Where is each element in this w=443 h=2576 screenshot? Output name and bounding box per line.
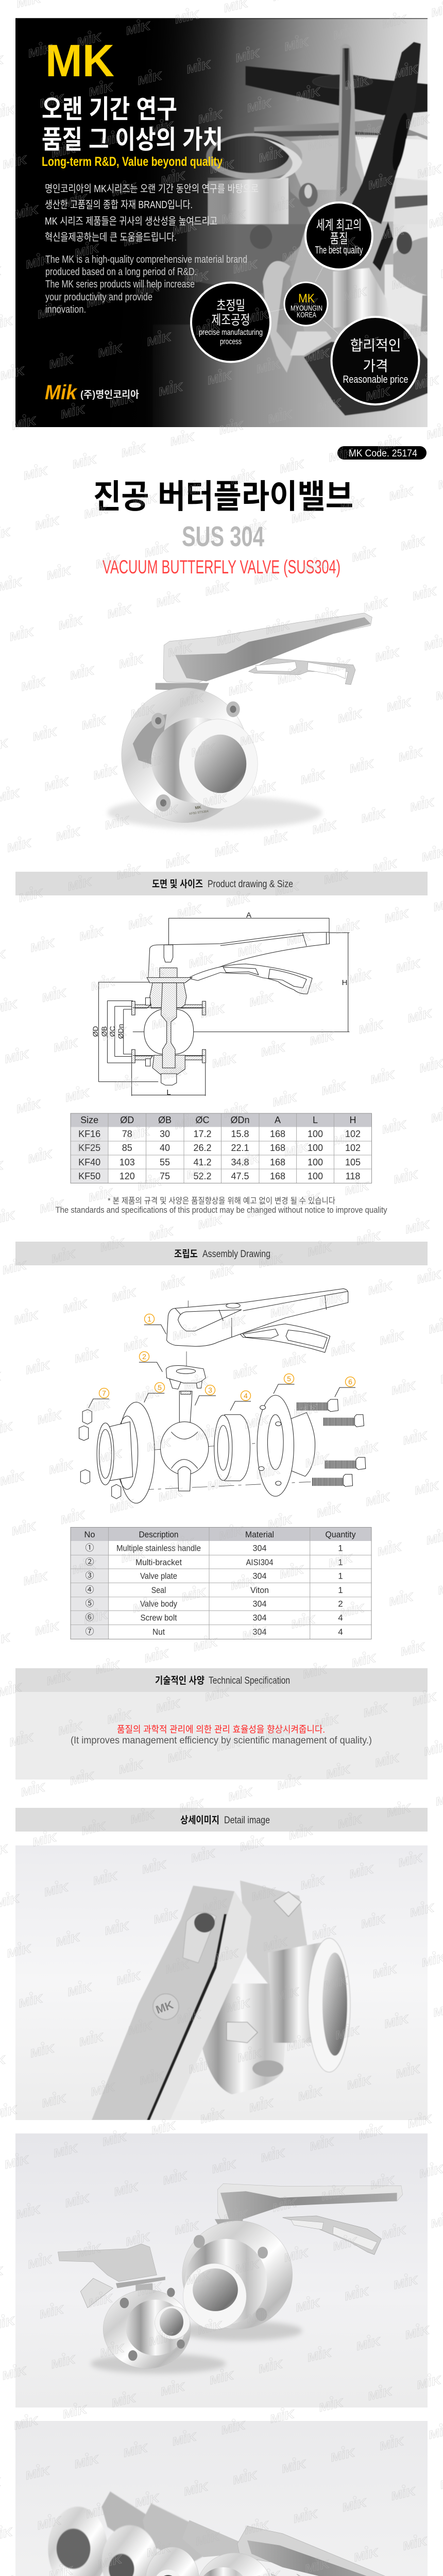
section header: detail image: Detail image	[224, 1815, 270, 1826]
English description: The MK series products will help increase	[45, 279, 195, 290]
table rows: 34.8	[231, 1157, 249, 1167]
assembly exploded view: 3	[208, 1386, 212, 1394]
English description	[45, 254, 247, 315]
spec text English: (It improves management efficiency by scientific management of quality.)	[71, 1735, 372, 1746]
parts rows: ④	[86, 1585, 94, 1595]
photo 1: handle close-up	[15, 1845, 428, 2120]
parts rows: Multiple stainless handle	[116, 1544, 201, 1553]
table rows: KF50	[78, 1171, 100, 1181]
parts rows: 304	[252, 1571, 267, 1581]
table rows: 100	[308, 1157, 323, 1167]
table rows: 118	[346, 1171, 360, 1181]
parts rows: Screw bolt	[140, 1613, 177, 1623]
logo text MK: MK	[45, 35, 114, 86]
table rows: 47.5	[231, 1171, 249, 1181]
heading Korean: 품질 그 이상의 가치	[42, 125, 223, 154]
parts rows: ⑦	[86, 1627, 94, 1636]
table rows: 168	[270, 1171, 285, 1181]
table rows: 85	[122, 1143, 132, 1153]
badge: the best quality: 품질	[330, 231, 348, 246]
technical drawing with dimensions	[91, 911, 349, 1097]
panel: hero banner	[15, 18, 428, 428]
Korean description: 명인코리아의 MK시리즈는 오랜 기간 동안의 연구를 바탕으로	[45, 183, 259, 195]
parts rows: Valve body	[140, 1599, 177, 1608]
table header row: A	[275, 1115, 281, 1125]
English description: The MK is a high-quality comprehensive material brand	[45, 254, 247, 265]
table rows: 41.2	[193, 1157, 212, 1167]
table rows	[78, 1129, 361, 1181]
parts rows: 1	[338, 1571, 343, 1581]
table rows: 30	[160, 1129, 170, 1139]
badge: the best quality: The best quality	[315, 245, 363, 256]
Korean description: 생산한 고품질의 종합 자재 BRAND입니다.	[45, 199, 193, 211]
section header: drawing and size: Product drawing & Size	[208, 879, 293, 890]
parts rows: Viton	[250, 1585, 269, 1595]
section header: assembly drawing	[15, 1242, 428, 1265]
part number callouts	[99, 1314, 355, 1400]
badge: precise manufacturing: process	[220, 337, 242, 346]
technical drawing with dimensions: ØDn	[116, 1024, 125, 1039]
badge: reasonable price: 합리적인	[350, 337, 401, 353]
parts rows: ②	[86, 1557, 94, 1567]
badge: precise manufacturing: 초정밀	[216, 298, 245, 313]
assembly exploded view	[79, 1289, 366, 1503]
table rows: 102	[345, 1143, 361, 1153]
parts rows: 1	[338, 1557, 343, 1567]
spec text red: 품질의 과학적 관리에 의한 관리 효율성을 향상시켜줍니다.	[117, 1724, 325, 1735]
assembly exploded view: 1	[147, 1315, 151, 1323]
table rows: 100	[308, 1171, 323, 1181]
table rows: KF40	[78, 1157, 100, 1167]
parts rows: 2	[338, 1599, 343, 1608]
English description: innovation.	[45, 304, 86, 315]
table header row	[80, 1115, 356, 1125]
spec header	[15, 1668, 428, 1692]
parts rows: 304	[252, 1613, 267, 1623]
product photo: butterfly valve	[107, 613, 372, 829]
table rows: 17.2	[193, 1129, 212, 1139]
parts rows: AISI304	[246, 1557, 273, 1567]
section header: detail image: 상세이미지	[180, 1815, 219, 1826]
table header row: L	[313, 1115, 318, 1125]
Korean description: 혁신을제공하는데 큰 도움을드립니다.	[45, 231, 177, 243]
photo 3: four valves in a row	[15, 2421, 428, 2576]
parts rows	[86, 1543, 343, 1637]
table rows: 105	[345, 1157, 361, 1167]
banner photo: valve with black handles	[15, 18, 428, 428]
technical drawing with dimensions: ØB	[100, 1026, 108, 1037]
table rows: 103	[120, 1157, 135, 1167]
material heading: SUS 304	[182, 520, 264, 552]
heading Korean: 오랜 기간 연구	[42, 95, 177, 124]
table rows: 75	[160, 1171, 170, 1181]
table rows: 55	[160, 1157, 170, 1167]
panel: technical specification	[15, 1668, 428, 1780]
table rows: KF16	[78, 1129, 100, 1139]
English description: produced based on a long period of R&D.	[45, 266, 197, 278]
badge: precise manufacturing: 제조공정	[211, 312, 250, 328]
table rows: 168	[270, 1143, 285, 1153]
heading Korean	[42, 95, 223, 154]
table rows: 120	[120, 1171, 135, 1181]
badge: MK Myoungin Korea: MK	[298, 292, 315, 306]
table rows: 40	[160, 1143, 170, 1153]
parts rows: ⑥	[86, 1613, 94, 1622]
section header: assembly drawing: Assembly Drawing	[202, 1249, 270, 1260]
connector lines between badges	[270, 267, 338, 334]
table footnote: * 본 제품의 규격 및 사양은 품질향상을 위해 예고 없이 변경 될 수 있습니다	[108, 1196, 335, 1206]
table rows: 26.2	[193, 1143, 212, 1153]
section header: drawing and size: 도면 및 사이즈	[152, 878, 203, 890]
photo 2: two valve sizes	[15, 2133, 428, 2408]
section header: drawing and size	[15, 872, 428, 895]
badge: MK Myoungin Korea: MYOUNGIN	[291, 304, 322, 313]
badge: MK Myoungin Korea: KOREA	[297, 311, 316, 319]
parts rows: ③	[86, 1571, 94, 1581]
badge: MK Myoungin Korea	[284, 282, 328, 326]
assembly exploded view: 2	[142, 1352, 146, 1361]
parts header row: Material	[245, 1530, 274, 1539]
parts rows: ⑤	[86, 1599, 94, 1608]
parts table	[71, 1527, 371, 1639]
parts rows: 1	[338, 1585, 343, 1595]
size table	[71, 1113, 372, 1183]
spec header: Technical Specification	[209, 1675, 290, 1686]
table rows: 102	[345, 1129, 361, 1139]
table rows: 15.8	[231, 1129, 249, 1139]
table header row: H	[349, 1115, 356, 1125]
assembly exploded view: 5	[158, 1383, 162, 1392]
parts rows: Multi-bracket	[135, 1557, 182, 1567]
engraved marking on valve: KF50 STS304	[189, 810, 209, 816]
table rows: 52.2	[193, 1171, 212, 1181]
company logo	[45, 381, 139, 404]
table header row: Size	[80, 1115, 98, 1125]
section header: detail image	[15, 1808, 428, 1832]
parts rows: Nut	[152, 1627, 165, 1637]
badge: precise manufacturing	[191, 282, 270, 362]
code badge: MK Code. 25174	[349, 448, 417, 459]
technical drawing with dimensions: ØD	[91, 1026, 99, 1037]
assembly exploded view: 4	[244, 1392, 248, 1400]
assembly exploded view: 5	[287, 1375, 291, 1383]
Korean description	[45, 183, 259, 243]
parts rows: 304	[252, 1627, 267, 1637]
title: 진공 버터플라이밸브	[93, 478, 353, 515]
company logo: Mik	[45, 381, 78, 404]
photo 1: handle close-up: MK	[154, 1998, 175, 2016]
parts rows: 1	[338, 1544, 343, 1553]
table header row: ØC	[196, 1115, 210, 1125]
Korean description: MK 시리즈 제품들은 귀사의 생산성을 높여드리고	[45, 215, 217, 227]
table footnote: The standards and specifications of this product may be changed without notice to improve quality	[56, 1205, 387, 1215]
technical drawing with dimensions: H	[342, 978, 347, 987]
table rows: 168	[270, 1129, 285, 1139]
badge: the best quality: 세계 최고의	[316, 217, 362, 233]
badge: reasonable price	[332, 317, 419, 404]
table header row: ØDn	[230, 1115, 250, 1125]
parts header row	[84, 1530, 356, 1539]
parts rows: 4	[338, 1627, 343, 1637]
table rows: 78	[122, 1129, 132, 1139]
table header row: ØB	[158, 1115, 172, 1125]
spec header: 기술적인 사양	[155, 1675, 205, 1686]
code badge	[337, 446, 427, 460]
technical drawing with dimensions: A	[246, 911, 251, 920]
table footnote	[56, 1196, 387, 1215]
parts header row: No	[84, 1530, 95, 1539]
parts rows: 304	[252, 1544, 267, 1553]
parts rows: 304	[252, 1599, 267, 1608]
subheading English: Long-term R&D, Value beyond quality	[42, 155, 223, 169]
engraved marking on valve	[188, 804, 209, 816]
engraved marking on valve: MK	[195, 805, 202, 810]
technical drawing with dimensions: ØC	[108, 1026, 116, 1037]
parts rows: ①	[86, 1543, 94, 1553]
parts rows: 4	[338, 1613, 343, 1623]
table rows: 100	[308, 1143, 323, 1153]
technical drawing with dimensions: L	[166, 1088, 171, 1097]
badge: precise manufacturing: precise manufacturing	[199, 328, 263, 337]
table rows: 100	[308, 1129, 323, 1139]
English product name: VACUUM BUTTERFLY VALVE (SUS304)	[103, 556, 340, 578]
assembly exploded view: 6	[348, 1378, 352, 1386]
table rows: 168	[270, 1157, 285, 1167]
parts header row: Quantity	[326, 1530, 356, 1539]
badge: reasonable price: 가격	[363, 358, 388, 374]
table rows: KF25	[78, 1143, 100, 1153]
parts rows: Seal	[151, 1585, 166, 1595]
section header: assembly drawing: 조립도	[174, 1248, 198, 1260]
parts rows: Valve plate	[140, 1571, 177, 1581]
assembly exploded view: 7	[102, 1389, 106, 1397]
company logo: (주)명인코리아	[80, 389, 139, 400]
badge: the best quality	[305, 202, 372, 269]
badge: reasonable price: Reasonable price	[343, 374, 408, 385]
English description: your productivity and provide	[45, 292, 152, 303]
parts header row: Description	[139, 1530, 178, 1539]
table header row: ØD	[120, 1115, 134, 1125]
table rows: 22.1	[231, 1143, 249, 1153]
